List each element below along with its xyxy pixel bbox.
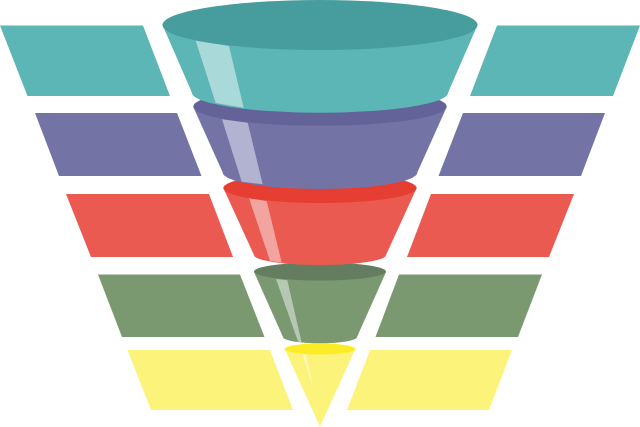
right band: purple (438, 113, 605, 176)
right band: teal (470, 26, 640, 96)
funnel tier: red (223, 173, 417, 265)
funnel tier: purple (193, 87, 447, 189)
right band: yellow (347, 350, 512, 410)
funnel tier: green (254, 262, 386, 343)
funnel tier: teal (162, 0, 478, 113)
right band: red (407, 194, 574, 257)
left band: teal (0, 26, 170, 96)
left band: yellow (128, 350, 293, 410)
left band: red (66, 194, 233, 257)
left band: green (98, 274, 264, 337)
right band: green (376, 274, 542, 337)
left band: purple (35, 113, 202, 176)
funnel tier: yellow (285, 344, 355, 427)
